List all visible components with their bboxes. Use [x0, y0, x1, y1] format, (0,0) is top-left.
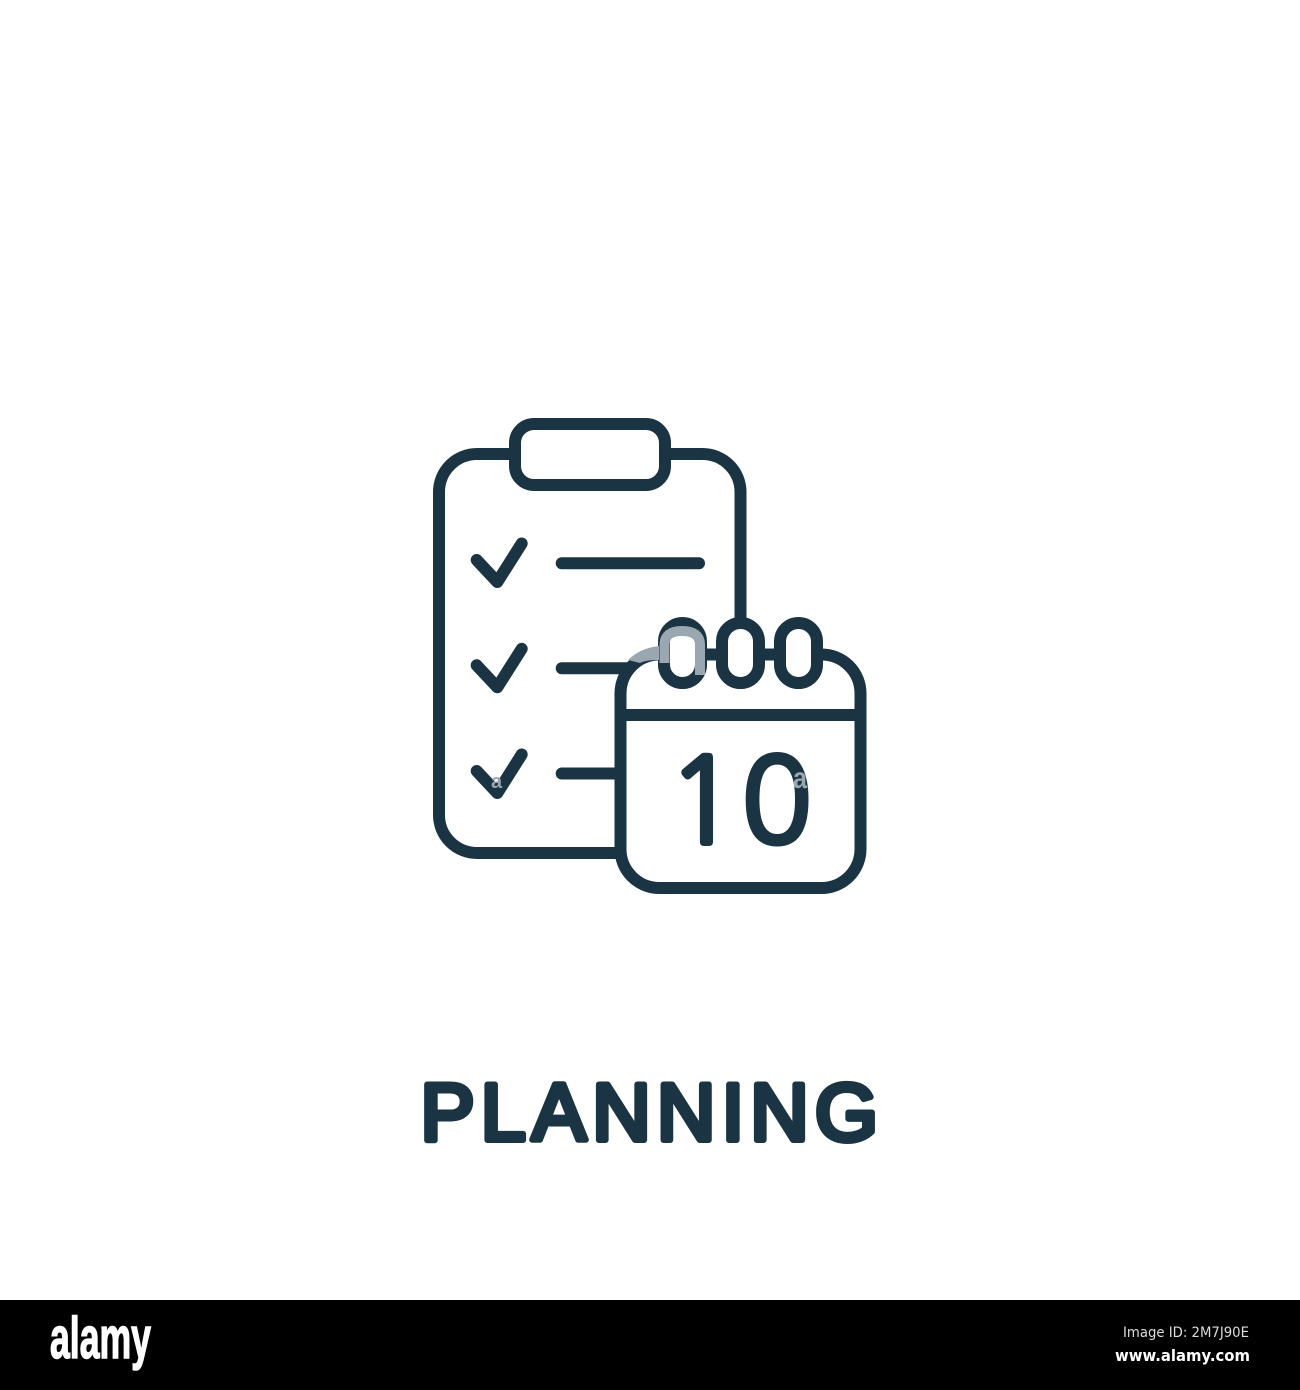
icon: calendar rings — [664, 623, 817, 683]
icon: first checklist row — [477, 544, 699, 582]
logo: alamy: alamy — [50, 1306, 151, 1371]
icon: third checklist row — [477, 754, 618, 793]
watermark fragments: a — [491, 771, 503, 793]
icon: calendar date number: 0 — [741, 742, 813, 860]
icon: clipboard clip — [515, 424, 665, 485]
title: PLANNING: PLANNING — [420, 1068, 878, 1158]
icon: clipboard board — [439, 454, 740, 853]
icon: second checklist row — [477, 649, 628, 687]
watermark fragments — [491, 631, 807, 795]
icon: calendar body — [620, 654, 860, 888]
image id: Image ID: 2M7J90E — [1123, 1325, 1249, 1341]
watermark fragments: a — [793, 762, 807, 795]
footer band — [0, 1300, 1300, 1390]
icon: calendar date number: 1 — [667, 742, 739, 860]
website address: www.alamy.com — [1115, 1346, 1250, 1365]
icon: planning clipboard and calendar — [439, 424, 860, 888]
